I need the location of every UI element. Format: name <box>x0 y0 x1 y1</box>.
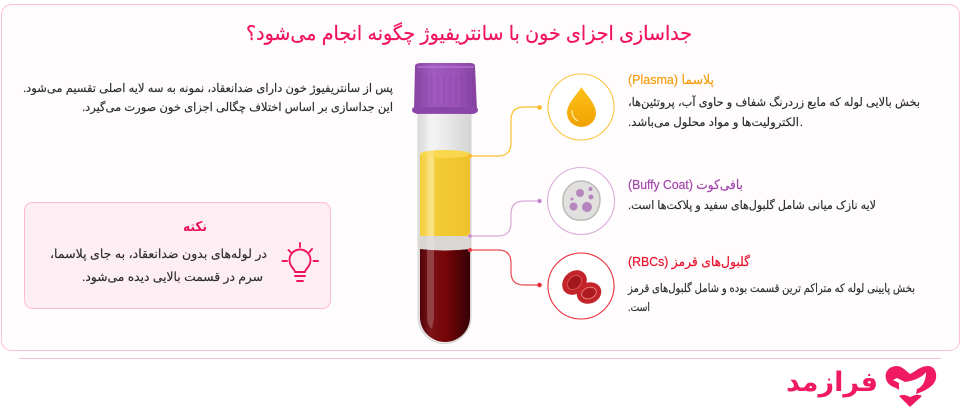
footer divider <box>19 358 941 360</box>
arrow: plasma <box>468 106 541 158</box>
plasma layer <box>420 150 470 237</box>
panel: note <box>24 202 330 308</box>
intro text: این جداسازی بر اساس اختلاف چگالی اجزای خون صورت می‌گیرد. <box>82 100 393 115</box>
buffy coat layer <box>420 236 470 250</box>
icon: white blood cell <box>548 168 614 234</box>
red cells text <box>627 281 915 314</box>
buffy coat item <box>548 168 876 234</box>
icon: plasma drop <box>548 74 614 140</box>
title: جداسازی اجزای خون با سانتریفیوژ چگونه انجام می‌شود؟ <box>246 22 692 45</box>
plasma text <box>628 95 920 130</box>
arrow: red cells <box>468 248 541 287</box>
glass highlight <box>427 114 434 329</box>
red cells item <box>548 253 915 319</box>
intro text: پس از سانتریفیوژ خون دارای ضدانعقاد، نمونه به سه لایه اصلی تقسیم می‌شود. <box>23 82 393 96</box>
plasma item <box>548 72 920 140</box>
red cells text: است. <box>628 301 650 314</box>
logo wordmark: فرازمد <box>786 367 878 398</box>
note heading: نکته <box>183 219 207 234</box>
plasma text: بخش بالایی لوله که مایع زردرنگ شفاف و حاوی آب، پروتئین‌ها، <box>628 95 920 110</box>
note text: سرم در قسمت بالایی دیده می‌شود. <box>82 270 263 285</box>
intro text <box>23 82 393 115</box>
plasma text: الکترولیت‌ها و مواد محلول می‌باشد. <box>628 116 799 130</box>
blood tube <box>414 63 477 343</box>
cap <box>414 63 477 114</box>
glass <box>418 112 471 343</box>
icon: red blood cells <box>548 253 614 319</box>
red cells heading: گلبول‌های قرمز (RBCs) <box>628 254 751 270</box>
arrow: buffy coat <box>468 199 541 238</box>
red cell layer <box>420 249 470 342</box>
plasma heading: پلاسما (Plasma) <box>628 72 714 87</box>
buffy coat heading: بافی‌کوت (Buffy Coat) <box>628 177 743 193</box>
logo heart <box>886 366 936 407</box>
red cells text: بخش پایینی لوله که متراکم ترین قسمت بوده و شامل گلبول‌های قرمز <box>627 281 915 296</box>
plasma text: . <box>800 116 803 129</box>
buffy coat text: لایه نازک میانی شامل گلبول‌های سفید و پلاکت‌ها است. <box>628 198 876 213</box>
note text <box>50 247 267 285</box>
logo <box>786 366 936 407</box>
note text: در لوله‌های بدون ضدانعقاد، به جای پلاسما، <box>50 247 267 262</box>
icon: light bulb <box>282 243 318 281</box>
